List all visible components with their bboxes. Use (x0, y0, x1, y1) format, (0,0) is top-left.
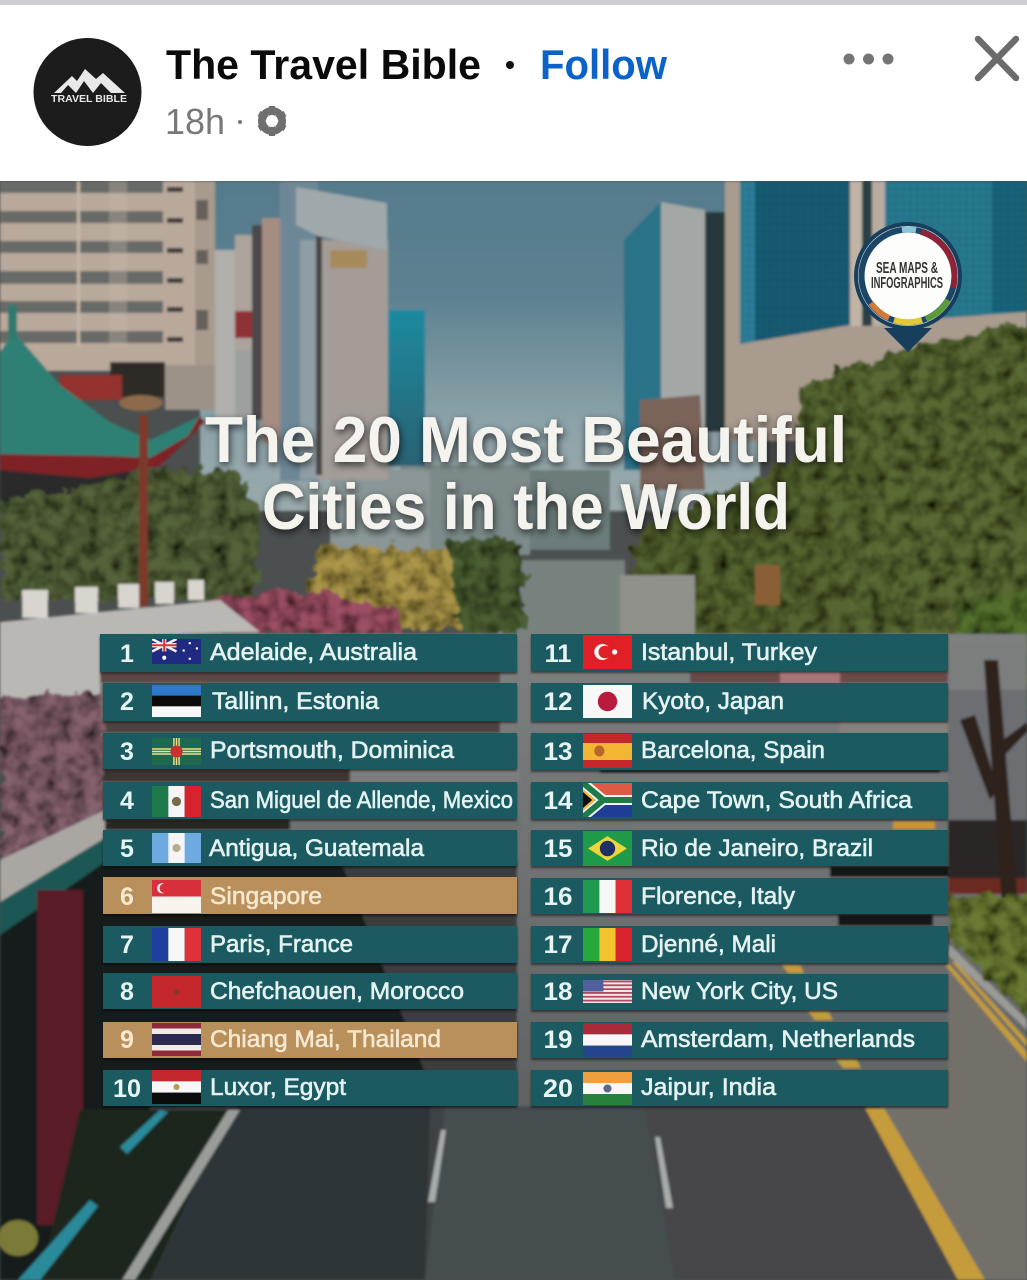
row 15: Rio de Janeiro, Brazil (641, 835, 873, 862)
row 2: Tallinn, Estonia (212, 688, 380, 715)
row 18 (531, 974, 948, 1010)
row 14 (531, 782, 948, 819)
row 10: Luxor, Egypt (210, 1074, 346, 1101)
row 8: 8 (120, 978, 134, 1006)
title: The 20 Most Beautiful (205, 403, 847, 476)
row 5: 5 (120, 835, 134, 863)
ranking table: left column (100, 634, 517, 1106)
road surface (100, 634, 1027, 1280)
flag: Brazil (583, 831, 632, 866)
row 4: 4 (120, 787, 134, 815)
row 14: Cape Town, South Africa (641, 787, 913, 814)
row 13: 13 (544, 738, 572, 766)
row 3 (103, 733, 517, 769)
ranking table: right column (531, 634, 948, 1106)
flag: Netherlands (583, 1023, 632, 1057)
row 14: 14 (544, 787, 573, 815)
row 1 (100, 634, 517, 672)
row 16: 16 (544, 883, 572, 911)
right row gaps: vehicles and trees (600, 672, 948, 926)
row 19: 19 (544, 1026, 572, 1054)
row 6 highlighted: 6 (120, 883, 134, 911)
flag: France (152, 928, 201, 961)
distant city (400, 465, 530, 555)
building: centre right tower (624, 202, 725, 490)
logo pin: SEA Maps & Infographics: INFOGRAPHICS (871, 275, 943, 292)
row 20: Jaipur, India (641, 1074, 777, 1101)
trees mid (205, 540, 525, 636)
row 16: Florence, Italy (641, 883, 795, 910)
row 12 (531, 683, 948, 721)
hedge (950, 895, 1027, 1015)
row 1: Adelaide, Australia (210, 639, 418, 666)
row 20: 20 (543, 1075, 573, 1103)
row 3: Portsmouth, Dominica (210, 737, 455, 764)
logo pin: SEA Maps & Infographics (854, 222, 962, 352)
icon: close (978, 39, 1016, 78)
right roadside: wall, trunk and hedge (948, 660, 1027, 1030)
timestamp: 18h (165, 101, 225, 142)
page name: The Travel Bible (166, 41, 481, 88)
row 4: San Miguel de Allende, Mexico (210, 787, 513, 814)
building: centre towers (215, 181, 425, 481)
flag: Estonia (152, 685, 201, 717)
avatar: The Travel Bible logo (34, 38, 142, 146)
row 12: Kyoto, Japan (642, 688, 784, 715)
flag: Egypt (152, 1070, 201, 1104)
pagoda roof (0, 305, 205, 510)
row 8: Chefchaouen, Morocco (210, 978, 464, 1005)
trees right (620, 325, 1027, 710)
flag: Morocco (152, 976, 201, 1008)
row 16 (531, 878, 948, 914)
row 7 (103, 926, 517, 963)
icon: privacy gear (259, 106, 285, 136)
row 18: 18 (544, 978, 573, 1006)
row 11: Istanbul, Turkey (641, 639, 817, 666)
row 17: Djenné, Mali (641, 931, 776, 958)
icon: more options (844, 54, 894, 64)
flag: Japan (583, 685, 632, 718)
flag: Guatemala (152, 833, 201, 863)
road lane markings (782, 962, 1027, 1280)
street far: traffic and buildings (495, 560, 780, 635)
flag: United States (583, 980, 632, 1003)
flag: Dominica (152, 738, 201, 765)
white road dashes (428, 1130, 673, 1208)
flag: Turkey (583, 635, 632, 669)
row 12: 12 (544, 688, 572, 716)
row 18: New York City, US (641, 978, 838, 1005)
sky (200, 181, 760, 511)
row 9 highlighted: 9 (120, 1026, 134, 1054)
row 9 highlighted (103, 1022, 517, 1058)
flowers left (0, 690, 106, 865)
row 8 (103, 973, 517, 1009)
row 19 (531, 1022, 948, 1058)
row 20 (531, 1070, 948, 1106)
header: white post bar (0, 0, 1027, 181)
flag: South Africa (583, 783, 632, 817)
row 7: 7 (120, 931, 134, 959)
row 6 highlighted: Singapore (210, 883, 322, 910)
white fence wall (0, 580, 260, 700)
building: right glass block (725, 181, 1027, 441)
middle dot (238, 120, 242, 124)
row 10 (103, 1070, 517, 1106)
row 13 (531, 733, 948, 770)
row 2: 2 (120, 688, 134, 716)
row 11: 11 (544, 640, 572, 668)
row 2 (103, 683, 517, 721)
follow link: Follow (540, 41, 667, 88)
title: Cities in the World (262, 470, 790, 543)
row 15: 15 (544, 835, 573, 863)
row 6 highlighted (103, 877, 517, 914)
separator dot (506, 61, 514, 69)
flag: Spain (583, 734, 632, 768)
row 5 (103, 830, 517, 866)
row 4 (103, 782, 517, 819)
row 15 (531, 830, 948, 866)
flag: Australia (152, 639, 201, 664)
building: left apartment block (0, 181, 215, 410)
logo pin: SEA Maps & Infographics: SEA MAPS & (876, 260, 938, 277)
row 13: Barcelona, Spain (641, 737, 825, 764)
row 17: 17 (544, 931, 572, 959)
lamp post (119, 395, 163, 607)
row 19: Amsterdam, Netherlands (641, 1026, 915, 1053)
flag: Singapore (152, 880, 201, 913)
lower left structure (0, 810, 240, 1280)
flag: Mali (583, 928, 632, 961)
flag: Thailand (152, 1023, 201, 1056)
row 10: 10 (113, 1075, 141, 1103)
flag: Italy (583, 880, 632, 913)
avatar: The Travel Bible logo: TRAVEL BIBLE (51, 94, 127, 105)
row 17 (531, 926, 948, 963)
row 11 (531, 634, 948, 671)
flag: Mexico (152, 786, 201, 817)
row 3: 3 (120, 738, 134, 766)
row 1: 1 (120, 640, 134, 668)
row 7: Paris, France (210, 931, 353, 958)
trees left (0, 470, 262, 600)
left row gaps: flowers and pavement (100, 672, 520, 830)
flag: India (583, 1072, 632, 1105)
title (205, 403, 847, 543)
row 5: Antigua, Guatemala (209, 835, 425, 862)
row 9 highlighted: Chiang Mai, Thailand (210, 1026, 441, 1053)
